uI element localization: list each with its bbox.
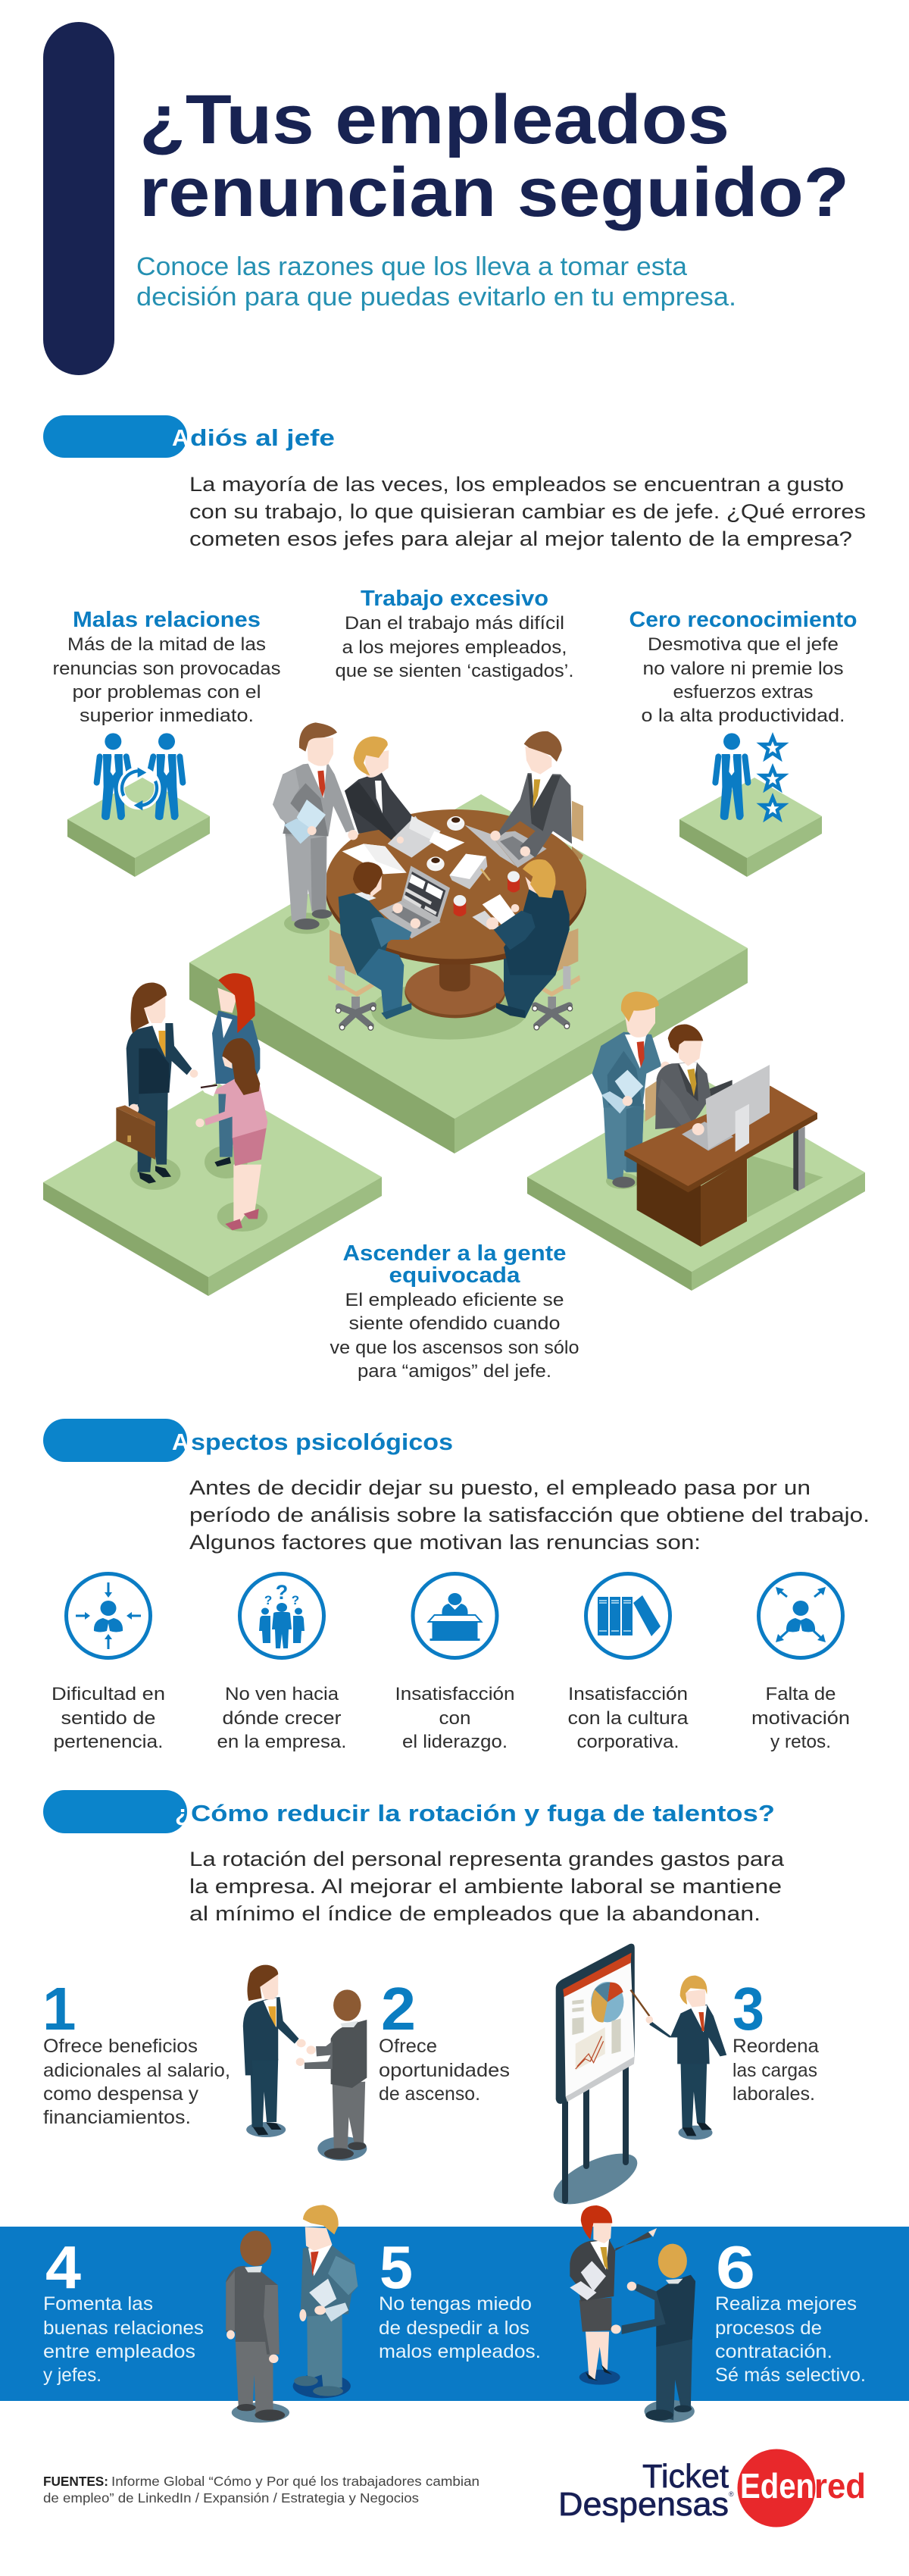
icon: sentido de pertenencia [67,1573,150,1658]
icon: personas con preguntas: ? [264,1593,272,1607]
logo: edenred [738,2449,866,2527]
logo: edenred: red [814,2466,866,2506]
text block: trabajo excesivo: que se sienten ‘castigados’. [335,661,574,681]
list item 1 [42,1975,230,2128]
list item 2: Ofrece [379,2036,437,2057]
section pill: aspectos psicológicos [43,1419,187,1462]
intro text: adiós al jefe: La mayoría de las veces, los empleados se encuentran a gusto [189,473,844,496]
list item 6: contratación. [715,2341,832,2362]
text block: ascender a la gente equivocada: Ascender a la gente [342,1241,567,1266]
captions: factores: motivación [751,1708,850,1729]
list item 3 [733,1975,819,2105]
text block: trabajo excesivo: Trabajo excesivo [361,587,548,611]
captions: factores: corporativa. [577,1732,679,1752]
captions: factores: en la empresa. [217,1732,347,1752]
title: renuncian seguido? [139,154,849,231]
text block: malas relaciones: superior inmediato. [80,706,254,726]
back chair [572,801,583,841]
list item 4: Fomenta las [43,2293,153,2315]
heading: adiós al jefe: A [172,424,189,451]
logo: ticket despensas: Despensas [558,2486,729,2523]
list item 4: 4 [45,2233,82,2301]
text block: cero reconocimiento: Cero reconocimiento [629,608,857,632]
laptop front [379,865,450,938]
text block: malas relaciones: renuncias son provocadas [53,659,281,679]
list item 6: 6 [716,2233,755,2301]
list item 4 [43,2233,204,2386]
captions: factores: Insatisfacción [568,1684,688,1704]
captions: factores: con la cultura [568,1708,689,1729]
woman in pink [195,1038,267,1230]
text block: cero reconocimiento: esfuerzos extras [673,682,814,703]
blue band [0,2227,909,2401]
standing man blue [592,991,670,1188]
illustration: handshake pair [243,1965,367,2161]
list item 3: laborales. [733,2083,815,2105]
heading: cómo reducir: ¿ [175,1800,189,1826]
illustration: woman and man on band [570,2205,695,2423]
text block: trabajo excesivo [335,587,574,681]
intro text: adiós al jefe: con su trabajo, lo que quisieran cambiar es de jefe. ¿Qué errores [189,500,866,523]
flip chart stand shadow [546,2143,645,2214]
heading: aspectos psicológicos: spectos psicológicos [191,1429,453,1455]
title: ¿Tus empleados [139,81,729,158]
captions: factores: pertenencia. [53,1732,164,1752]
list item 6: procesos de [715,2318,822,2339]
list item 5 [379,2233,541,2362]
woman blonde [345,737,414,840]
subtitle: Conoce las razones que los lleva a tomar esta [136,252,687,281]
sources: FUENTES: [43,2474,108,2489]
list item 3: Reordena [733,2036,819,2057]
presenter [646,1976,726,2139]
seated man right [472,859,580,1030]
heading: cómo reducir: Cómo reducir la rotación y fuga de talentos? [191,1800,775,1826]
captions: factores: No ven hacia [225,1684,339,1704]
standing man grey [273,722,358,930]
list item 1: 1 [42,1975,76,2042]
icon: falta de motivación [759,1573,842,1658]
text block: ascender a la gente equivocada: ve que los ascensos son sólo [330,1338,579,1358]
captions: factores: Dificultad en [52,1684,165,1704]
logo: edenred: Eden [740,2466,814,2506]
icon: stars [761,737,784,818]
captions: factores: Insatisfacción [395,1684,515,1704]
text block: cero reconocimiento [629,608,857,726]
list item 1: financiamientos. [43,2107,191,2128]
text block: ascender a la gente equivocada: equivocada [389,1263,520,1288]
platform: malas relaciones [67,778,210,877]
captions: factores: sentido de [61,1708,156,1729]
heading: adiós al jefe: diós al jefe [190,424,335,451]
text block: cero reconocimiento: Desmotiva que el jefe [648,634,839,655]
platform: cero reconocimiento [679,778,822,877]
man upper right [464,731,572,868]
seated man left [328,862,420,1030]
logo: ticket despensas: Ticket [642,2458,729,2495]
text block: malas relaciones [53,608,281,726]
red cans [454,871,520,916]
captions: factores: Falta de [765,1684,836,1704]
captions: factores: y retos. [770,1732,831,1752]
text block: malas relaciones: Malas relaciones [73,608,261,632]
text block: trabajo excesivo: Dan el trabajo más difícil [345,613,564,634]
list item 2: oportunidades [379,2060,510,2081]
list item 2 [379,1975,510,2105]
list item 4: entre empleados [43,2341,195,2362]
icon: personas con preguntas [239,1573,324,1658]
illustration: boss and employee at desk [592,991,823,1247]
platform: main meeting [189,794,748,1153]
platform: ascender left [43,1082,382,1296]
section pill: cómo reducir [43,1790,187,1833]
intro text: adiós al jefe: cometen esos jefes para alejar al mejor talento de la empresa? [189,527,852,550]
intro text: aspectos psicológicos: Algunos factores que motivan las renuncias son: [189,1531,701,1554]
icon: two men with rotation arrows [97,733,183,820]
woman red hair [212,973,260,1166]
icon: personas con preguntas: ? [276,1581,288,1604]
intro text: aspectos psicológicos: Antes de decidir dejar su puesto, el empleado pasa por un [189,1476,811,1499]
seated man [655,1025,733,1131]
list item 4: y jefes. [43,2365,102,2386]
section pill: adiós al jefe [43,415,187,458]
logo: ticket despensas: ® [729,2490,734,2498]
list item 5: 5 [380,2233,413,2301]
text block: ascender a la gente equivocada: siente ofendido cuando [348,1313,561,1334]
text block: malas relaciones: por problemas con el [73,682,261,703]
flip chart legs [565,2058,626,2201]
list item 6 [715,2233,866,2386]
text block: ascender a la gente equivocada: El empleado eficiente se [345,1290,564,1310]
illustration: flip chart with presenter [546,1944,726,2214]
sources: de empleo” de LinkedIn / Expansión / Estrategia y Negocios [43,2490,419,2506]
platform: ascender right [527,1078,865,1291]
captions: factores: el liderazgo. [402,1732,508,1752]
illustration: three women [116,973,267,1232]
icon: libros [586,1573,670,1658]
coffee cups [426,816,464,871]
table base [405,960,506,1018]
list item 2: 2 [381,1975,416,2042]
list item 5: No tengas miedo [379,2293,532,2315]
text block: ascender a la gente equivocada: para “amigos” del jefe. [358,1361,551,1382]
heading: aspectos psicológicos: A [172,1429,189,1455]
text block: cero reconocimiento: o la alta productividad. [641,706,845,726]
captions: factores: dónde crecer [223,1708,341,1729]
woman with briefcase [116,983,198,1184]
list item 3: las cargas [733,2060,817,2081]
illustration: meeting around table [273,722,586,1040]
list item 3: 3 [733,1975,764,2042]
sources: Informe Global “Cómo y Por qué los trabajadores cambian [111,2474,479,2489]
monitor and keyboard [682,1065,770,1152]
title accent bar [43,22,114,375]
table top [325,809,586,965]
intro text: aspectos psicológicos: período de análisis sobre la satisfacción que obtiene del trabajo. [189,1504,870,1526]
captions: factores [52,1684,850,1752]
logo: ticket despensas [558,2458,734,2523]
icon: man with three stars [715,733,748,820]
list item 2: de ascenso. [379,2083,480,2105]
office chair [645,1081,657,1122]
illustration: two men on band [226,2205,358,2423]
list item 6: Realiza mejores [715,2293,857,2315]
list item 5: de despedir a los [379,2318,529,2339]
list item 4: buenas relaciones [43,2318,204,2339]
subtitle: decisión para que puedas evitarlo en tu empresa. [136,283,736,311]
list item 1: como despensa y [43,2083,199,2105]
text block: trabajo excesivo: a los mejores empleados, [342,637,567,658]
text block: cero reconocimiento: no valore ni premie los [642,659,844,679]
text block: ascender a la gente equivocada [330,1241,579,1382]
intro text: cómo reducir: al mínimo el índice de empleados que la abandonan. [189,1902,761,1925]
desk [624,1086,817,1247]
papers and folder on table [342,816,490,889]
list item 6: Sé más selectivo. [715,2365,866,2386]
icon: liderazgo [413,1573,497,1658]
icon: personas con preguntas: ? [292,1593,299,1607]
list item 1: Ofrece beneficios [43,2036,198,2057]
intro text: cómo reducir: La rotación del personal representa grandes gastos para [189,1848,785,1870]
list item 1: adicionales al salario, [43,2060,230,2081]
text block: malas relaciones: Más de la mitad de las [67,634,266,655]
list item 5: malos empleados. [379,2341,541,2362]
captions: factores: con [439,1708,471,1729]
intro text: cómo reducir: la empresa. Al mejorar el ambiente laboral se mantiene [189,1875,782,1898]
